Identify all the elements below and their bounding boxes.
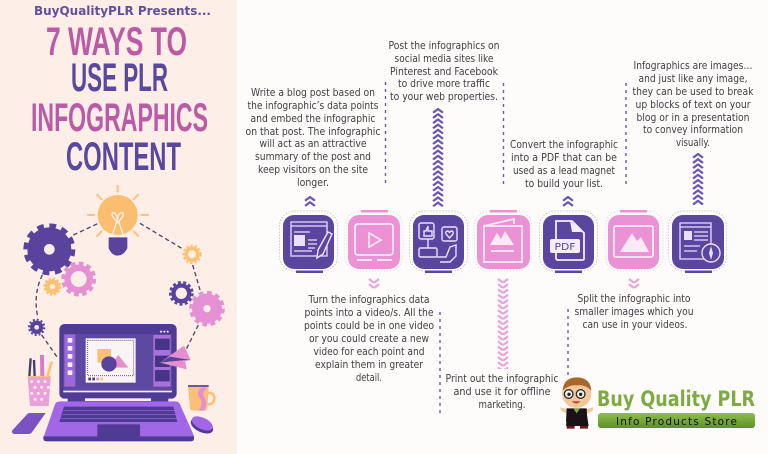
icon: large purple gear xyxy=(26,226,73,273)
step 4 text xyxy=(446,373,559,411)
step 5 text: used as a lead magnet xyxy=(513,165,615,177)
mascot xyxy=(560,377,593,429)
step 7 text: blog or in a presentation xyxy=(636,112,750,124)
step 5 arrow xyxy=(562,196,574,206)
step 6: split images xyxy=(574,210,694,331)
step 2 icon xyxy=(345,210,403,271)
icon: right orange gear xyxy=(183,246,201,263)
step 4 text: Print out the infographic xyxy=(446,373,559,385)
logo: Buy Quality PLR xyxy=(560,377,755,429)
dashed dividers xyxy=(386,82,626,415)
step 2 text: points could be in one video xyxy=(304,320,434,332)
step 2 text: explain them in greater xyxy=(315,359,424,371)
laptop xyxy=(43,324,194,441)
step 5 text: to build your list. xyxy=(525,178,603,190)
step 7 text: up blocks of text on your xyxy=(636,99,751,111)
step 4 text: and use it for offline xyxy=(454,386,550,398)
step 6 text: can use in your videos. xyxy=(582,319,688,331)
presenter heading: BuyQualityPLR Presents... xyxy=(34,3,211,18)
step 5 icon: PDF xyxy=(554,242,576,253)
step 3 text: to your web properties. xyxy=(390,91,498,103)
step 4 text: marketing. xyxy=(478,399,526,411)
title: USE PLR xyxy=(71,56,168,100)
step 5: PDF lead magnet xyxy=(510,139,618,273)
step 7 text xyxy=(632,60,754,149)
left panel background xyxy=(0,0,237,454)
step 7 arrow xyxy=(692,153,704,205)
step 1 text: summary of the post and xyxy=(255,151,371,163)
step 3 arrow xyxy=(432,108,444,207)
step 4 icon xyxy=(474,210,532,271)
logo tagline: Info Products Store xyxy=(616,416,737,428)
icon: right purple gear xyxy=(170,282,192,304)
icon: small left gear xyxy=(29,320,44,335)
pencil cup xyxy=(28,355,52,406)
step 3 text xyxy=(388,40,500,103)
step 7: visual information xyxy=(632,60,754,273)
icon: right pink gear xyxy=(191,293,223,325)
step 1 text: will act as an attractive xyxy=(260,138,366,150)
computer mouse xyxy=(188,414,216,437)
illustration: laptop, gears and light bulb xyxy=(12,185,223,441)
step 1 text xyxy=(246,87,381,189)
step 5 text xyxy=(510,139,618,190)
step 2 text: points into a video/s. All the xyxy=(304,307,434,319)
step 2 text xyxy=(304,294,434,384)
step 2 text: Turn the infographics data xyxy=(308,294,430,306)
step 2: video xyxy=(304,210,434,384)
step 4 arrow xyxy=(497,278,509,369)
step 7 text: and just like any image, xyxy=(638,73,748,85)
step 7 text: they can be used to break xyxy=(632,86,754,98)
step 1 icon xyxy=(280,211,338,273)
step 7 text: visually. xyxy=(676,137,710,149)
icon: small orange gear xyxy=(44,279,60,295)
step 6 text: smaller images which you xyxy=(574,306,694,318)
step 1 text: keep visitors on the site xyxy=(258,164,368,176)
step 1: blog post xyxy=(246,87,381,273)
step 2 text: or you could create a new xyxy=(309,333,429,345)
step 2 arrow xyxy=(368,278,380,288)
step 7 text: Infographics are images… xyxy=(634,60,752,72)
step 3 text: to drive more traffic xyxy=(398,78,490,90)
title: 7 WAYS TO xyxy=(46,20,187,64)
step 4: print xyxy=(446,210,559,411)
step 3: social media xyxy=(388,40,500,273)
step 1 text: longer. xyxy=(297,177,329,189)
step 5 text: into a PDF that can be xyxy=(511,152,617,164)
step 2 text: detail. xyxy=(356,372,382,384)
step 7 icon xyxy=(668,211,726,273)
step 3 text: Post the infographics on xyxy=(388,40,500,52)
step 3 text: social media sites like xyxy=(394,53,494,65)
title: CONTENT xyxy=(66,135,181,179)
phone xyxy=(12,413,46,434)
title: INFOGRAPHICS xyxy=(31,96,208,140)
title xyxy=(31,20,208,179)
step 1 text: and embed the infographic xyxy=(250,113,376,125)
coffee mug xyxy=(188,386,214,411)
logo green bar xyxy=(598,413,755,428)
step 5 text: Convert the infographic xyxy=(510,139,618,151)
step 6 arrow xyxy=(628,278,640,288)
step 7 text: to convey information xyxy=(643,124,743,136)
icon: pink gear xyxy=(63,263,94,295)
dashed connection path xyxy=(36,223,200,357)
paper plane xyxy=(160,346,191,369)
step 1 text: the infographic’s data points xyxy=(248,100,378,112)
step 1 text: Write a blog post based on xyxy=(251,87,375,99)
step 6 icon xyxy=(605,210,663,271)
step 1 arrow xyxy=(304,196,316,206)
step 3 icon xyxy=(410,211,468,273)
step 3 text: Pinterest and Facebook xyxy=(390,66,498,78)
step 2 text: video for each point and xyxy=(314,346,424,358)
icon: light bulb xyxy=(87,185,149,256)
step 1 text: on that post. The infographic xyxy=(246,126,381,138)
step 6 text xyxy=(574,293,694,331)
step 6 text: Split the infographic into xyxy=(578,293,690,305)
